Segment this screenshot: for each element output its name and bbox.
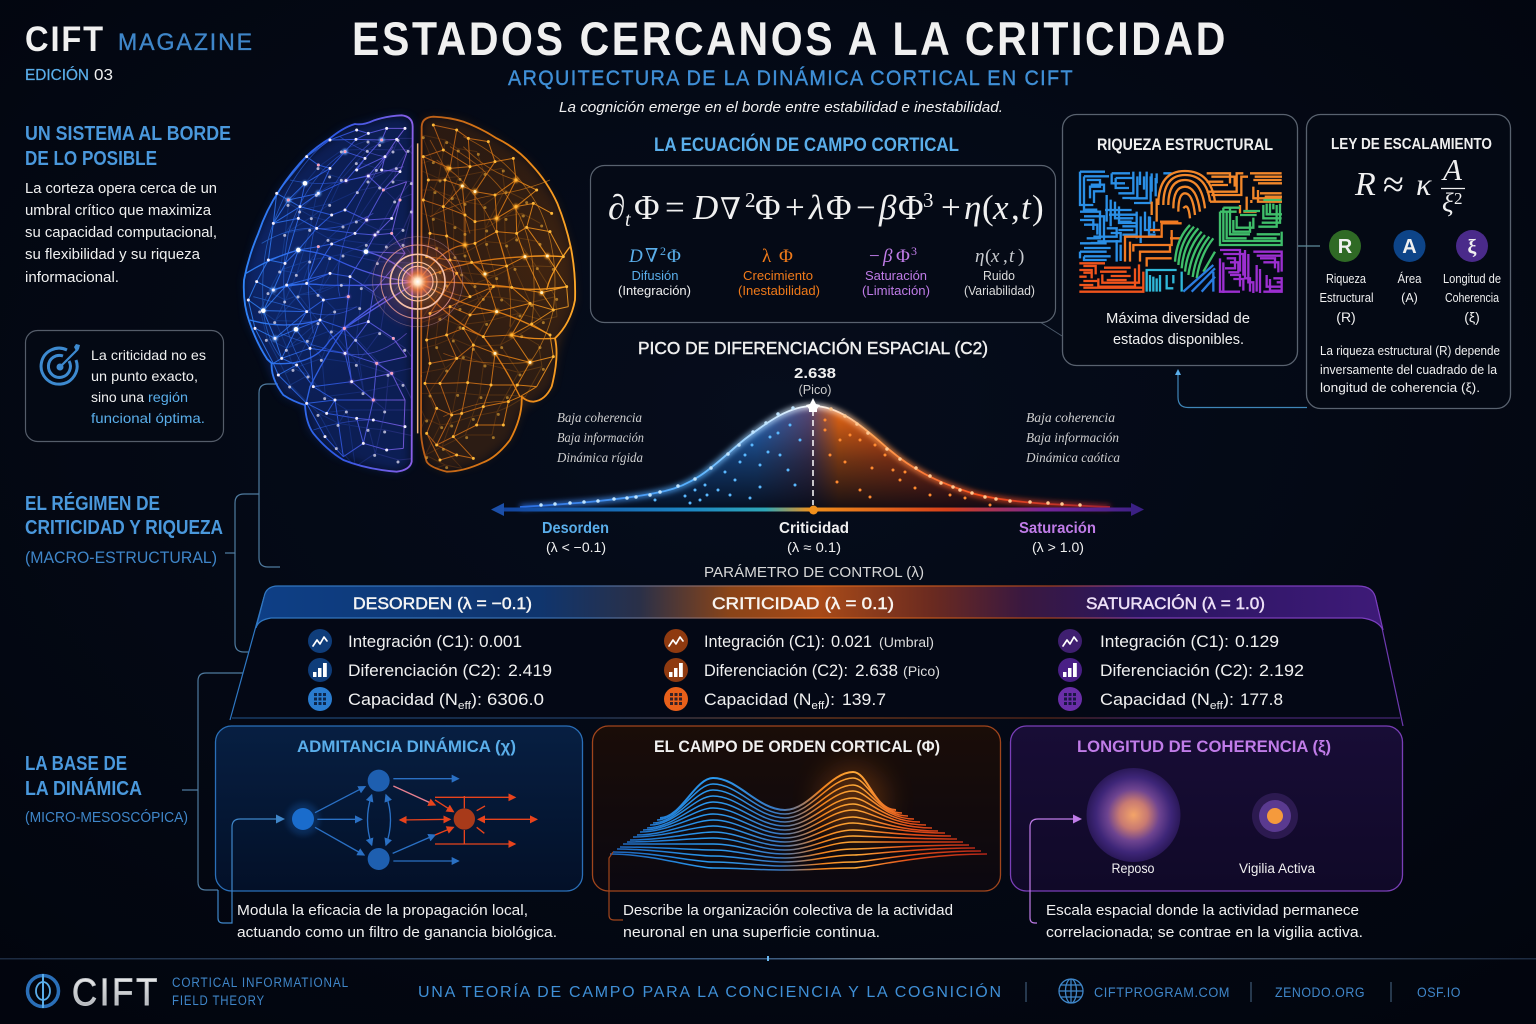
- connectors: left tree: [182, 384, 280, 890]
- title: ESTADOS CERCANOS A LA CRITICIDAD: [352, 12, 1228, 65]
- formula: 2: [1454, 189, 1462, 208]
- annotation: right side: Baja información: [1026, 431, 1119, 446]
- callout: criticality region: sino una: [91, 389, 144, 405]
- axis labels: [542, 520, 1096, 581]
- annotation: left side: Baja información: [557, 431, 644, 446]
- main equation: 2: [745, 188, 756, 212]
- icon: globe: [1059, 979, 1083, 1003]
- main equation: =: [665, 188, 685, 227]
- panel: coherence length: [1010, 726, 1402, 891]
- description: admittance: Modula la eficacia de la propagación local,: [237, 902, 528, 919]
- annotation: left side: [556, 411, 644, 466]
- explanation: [1320, 344, 1500, 395]
- intro text block: UN SISTEMA AL BORDE: [25, 123, 231, 145]
- arrow: richness to variables: [1298, 245, 1320, 247]
- main equation: λ: [808, 188, 824, 227]
- term: noise: [964, 246, 1035, 298]
- variable: R: R: [1338, 236, 1353, 258]
- peak value: 2.638: [794, 365, 836, 382]
- section label: regime: EL RÉGIMEN DE: [25, 492, 160, 515]
- variable: A: A: [1402, 236, 1417, 258]
- main equation: D: [692, 188, 718, 227]
- variable: A: Área: [1398, 271, 1422, 286]
- explanation: inversamente del cuadrado de la: [1320, 363, 1497, 377]
- intro text block: su capacidad computacional,: [25, 225, 217, 241]
- intro text block: [25, 123, 231, 286]
- section label: base: LA DINÁMICA: [25, 777, 142, 800]
- peak value: [794, 365, 836, 397]
- term: growth: Φ: [779, 246, 793, 267]
- intro text block: umbral crítico que maximiza: [25, 203, 212, 219]
- arrow: into coherence: [1030, 814, 1082, 923]
- term: growth: [738, 246, 820, 298]
- footer: CIFTPROGRAM.COM: [1094, 984, 1230, 1000]
- tagline: La cognición emerge en el borde entre estabilidad e inestabilidad.: [559, 99, 1003, 116]
- column: criticality: Diferenciación (C2):: [704, 662, 848, 680]
- section label: regime: (MACRO-ESTRUCTURAL): [25, 548, 217, 567]
- rest state: Reposo: [1112, 861, 1154, 876]
- footer: FIELD THEORY: [172, 993, 265, 1008]
- column: saturation: 2.192: [1259, 662, 1304, 680]
- logo mark: [28, 974, 58, 1008]
- right neurons: [423, 125, 567, 460]
- labyrinth fingerprint: [1079, 171, 1286, 296]
- annotation: left side: Dinámica rígida: [556, 451, 643, 466]
- term: diffusion: ∇: [645, 246, 658, 267]
- main equation: t: [625, 209, 631, 231]
- axis: [500, 508, 1135, 512]
- column: criticality: (Pico): [903, 664, 940, 679]
- panel: dynamic admittance: [216, 726, 582, 891]
- axis labels: PARÁMETRO DE CONTROL (λ): [704, 564, 924, 581]
- variable: xi: [1443, 230, 1501, 325]
- term: diffusion: 2: [660, 244, 666, 258]
- table body outline: [230, 597, 1402, 718]
- annotation: right side: [1025, 411, 1120, 466]
- main equation: ∂: [608, 188, 625, 227]
- peak marker: [812, 410, 814, 505]
- variable: R: Riqueza: [1326, 272, 1366, 286]
- column: criticality: Capacidad (N: [704, 691, 805, 709]
- arrow: law back to richness: [1175, 369, 1307, 408]
- term: noise: x: [990, 246, 1000, 267]
- variable: R: (R): [1336, 309, 1356, 325]
- column: saturation: 177.8: [1240, 691, 1283, 709]
- main equation: 3: [923, 188, 934, 212]
- term: saturation: β: [882, 246, 893, 267]
- footer: OSF.IO: [1417, 984, 1461, 1000]
- variable: xi: Coherencia: [1445, 291, 1499, 305]
- panel: field equation: [590, 166, 1062, 336]
- column: disorder: 2.419: [508, 662, 552, 680]
- footer: [0, 956, 1536, 1014]
- section label: base: (MICRO-MESOSCÓPICA): [25, 809, 188, 826]
- column: disorder: ):: [471, 691, 482, 709]
- column: disorder: eff: [458, 700, 472, 712]
- network diagram: [286, 770, 537, 870]
- column: saturation: Capacidad (N: [1100, 691, 1201, 709]
- description: admittance: actuando como un filtro de ganancia biológica.: [237, 924, 557, 941]
- formula: [1354, 152, 1465, 218]
- variable: xi: (ξ): [1464, 309, 1480, 325]
- term: diffusion: (Integración): [618, 283, 691, 298]
- left hemisphere: [244, 115, 419, 472]
- column: saturation: ):: [1223, 691, 1234, 709]
- variable: xi: Longitud de: [1443, 272, 1501, 286]
- description: field: Describe la organización colectiva de la actividad: [623, 902, 953, 919]
- footer: UNA TEORÍA DE CAMPO PARA LA CONCIENCIA Y LA COGNICIÓN: [418, 982, 1001, 1001]
- main equation: −: [856, 188, 876, 227]
- column: saturation: eff: [1210, 700, 1224, 712]
- right neurons glow: [448, 168, 547, 362]
- section label: base: [25, 753, 188, 826]
- brain illustration: [244, 115, 575, 473]
- main equation: Φ: [634, 188, 660, 227]
- table header band: [256, 586, 1383, 630]
- column: saturation: Integración (C1):: [1100, 633, 1229, 651]
- description: field: neuronal en una superficie continua.: [623, 924, 880, 941]
- term: noise: ): [1018, 246, 1024, 267]
- description: field: [623, 902, 953, 941]
- term: diffusion: Φ: [667, 246, 681, 267]
- intro text block: La corteza opera cerca de un: [25, 181, 217, 197]
- panel: cortical order field: [592, 726, 1000, 891]
- term: saturation: Φ: [896, 246, 910, 267]
- formula: κ: [1416, 166, 1432, 202]
- main equation: Φ: [755, 188, 781, 227]
- term: saturation: Saturación: [865, 268, 927, 283]
- peak value: (Pico): [798, 383, 832, 397]
- variable: R: [1320, 230, 1374, 325]
- axis labels: Saturación: [1019, 520, 1096, 537]
- main equation: Φ: [826, 188, 852, 227]
- axis labels: Desorden: [542, 520, 609, 537]
- column: criticality: 139.7: [842, 691, 886, 709]
- column: disorder: Diferenciación (C2):: [348, 662, 501, 680]
- axis labels: (λ ≈ 0.1): [787, 540, 841, 555]
- column: criticality: eff: [811, 700, 825, 712]
- data points: [541, 408, 793, 505]
- column: criticality: 0.021: [831, 633, 872, 651]
- footer: CORTICAL INFORMATIONAL: [172, 975, 349, 990]
- main equation: (: [982, 188, 994, 227]
- brand: CIFT Magazine: CIFT: [25, 20, 105, 59]
- term: growth: λ: [762, 246, 772, 267]
- active wake state: Vigilia Activa: [1239, 861, 1315, 876]
- chart: bell curve of differentiation: [491, 398, 1144, 516]
- main equation: η: [964, 188, 981, 227]
- column: criticality: 2.638: [855, 662, 898, 680]
- brand: CIFT Magazine: EDICIÓN: [25, 67, 89, 84]
- term: noise: Ruido: [983, 268, 1015, 283]
- main equation: +: [785, 188, 805, 227]
- column headers: DESORDEN (λ = −0.1): [353, 594, 532, 613]
- column: criticality: Integración (C1):: [704, 633, 825, 651]
- term: noise: (Variabilidad): [964, 283, 1035, 298]
- panel: structural richness: RIQUEZA ESTRUCTURAL: [1097, 136, 1273, 154]
- intro text block: DE LO POSIBLE: [25, 148, 157, 170]
- callout: criticality region: La criticidad no es: [91, 347, 206, 363]
- term: noise: (: [985, 246, 991, 267]
- term: saturation: −: [869, 246, 880, 267]
- term: noise: ,: [1003, 246, 1008, 267]
- rest state: [1086, 768, 1180, 876]
- section label: regime: [25, 492, 223, 567]
- term: growth: (Inestabilidad): [738, 283, 820, 298]
- panel: scaling law: LEY DE ESCALAMIENTO: [1331, 136, 1492, 153]
- column: disorder: Integración (C1):: [348, 633, 474, 651]
- brand: CIFT Magazine: 03: [94, 67, 113, 84]
- table: regimes comparison: [230, 586, 1403, 726]
- explanation: longitud de coherencia (ξ).: [1320, 381, 1480, 395]
- formula: A: [1441, 152, 1463, 187]
- annotation: right side: Baja coherencia: [1026, 411, 1115, 426]
- formula: R: [1354, 166, 1376, 203]
- term: diffusion: Difusión: [632, 268, 678, 283]
- section label: regime: CRITICIDAD Y RIQUEZA: [25, 517, 223, 539]
- main equation: ,: [1011, 188, 1020, 227]
- glow behind orange peak: [819, 766, 887, 834]
- left hemisphere glow: [245, 117, 412, 472]
- section label: base: LA BASE DE: [25, 753, 127, 775]
- 3D wave surface: [610, 772, 987, 870]
- variable: A: (A): [1401, 291, 1418, 305]
- axis labels: (λ < −0.1): [546, 540, 606, 555]
- term: noise: η: [975, 246, 984, 267]
- panel: dynamic admittance: ADMITANCIA DINÁMICA (χ): [297, 737, 516, 756]
- brand: CIFT Magazine: [25, 20, 254, 84]
- variable: xi: ξ: [1468, 236, 1477, 258]
- term: saturation: [862, 244, 930, 298]
- central critical point with rings: [368, 143, 468, 433]
- main equation: +: [941, 188, 961, 227]
- heading: peak of spatial differentiation: PICO DE DIFERENCIACIÓN ESPACIAL (C2): [638, 337, 988, 358]
- description: coherence: correlacionada; se contrae en la vigilia activa.: [1046, 924, 1363, 941]
- description: coherence: [1046, 902, 1363, 941]
- column: disorder: Capacidad (N: [348, 691, 449, 709]
- main equation: ): [1032, 188, 1044, 227]
- panel: structural richness: Máxima diversidad de: [1106, 311, 1250, 327]
- icon: target: [41, 344, 80, 384]
- callout: criticality region: un punto exacto,: [91, 368, 198, 384]
- explanation: La riqueza estructural (R) depende: [1320, 344, 1500, 358]
- axis labels: (λ > 1.0): [1032, 540, 1084, 555]
- column: saturation: 0.129: [1235, 633, 1279, 651]
- column: criticality: [664, 629, 940, 712]
- column: disorder: 0.001: [479, 633, 522, 651]
- column: disorder: 6306.0: [487, 691, 544, 709]
- column headers: CRITICIDAD (λ = 0.1): [712, 594, 894, 613]
- formula: ξ: [1442, 188, 1454, 218]
- term: growth: Crecimiento: [743, 268, 813, 283]
- column: saturation: Diferenciación (C2):: [1100, 662, 1253, 680]
- main equation: Φ: [898, 188, 924, 227]
- column: criticality: ):: [824, 691, 835, 709]
- term: diffusion: D: [628, 246, 643, 267]
- panel: cortical order field: EL CAMPO DE ORDEN CORTICAL (Φ): [654, 737, 940, 756]
- left neurons: [248, 128, 405, 450]
- footer: ZENODO.ORG: [1275, 984, 1365, 1000]
- intro text block: su flexibilidad y su riqueza: [25, 247, 201, 263]
- main equation: t: [1021, 188, 1032, 227]
- main equation: β: [878, 188, 897, 227]
- description: admittance: [237, 902, 557, 941]
- column: criticality: (Umbral): [879, 635, 934, 650]
- heading: equation: LA ECUACIÓN DE CAMPO CORTICAL: [654, 134, 959, 156]
- subtitle: ARQUITECTURA DE LA DINÁMICA CORTICAL EN CIFT: [508, 67, 1074, 90]
- variable: R: Estructural: [1320, 291, 1374, 305]
- column: disorder: [308, 629, 552, 712]
- main equation: ∇: [720, 193, 741, 226]
- callout: criticality region: región: [148, 389, 188, 405]
- description: coherence: Escala espacial donde la actividad permanece: [1046, 902, 1359, 919]
- callout: criticality region: funcional óptima.: [91, 410, 205, 426]
- left neurons glow: [263, 140, 382, 338]
- intro text block: informacional.: [25, 270, 119, 286]
- callout: criticality region: [26, 330, 224, 442]
- panel: structural richness: estados disponibles.: [1113, 332, 1244, 348]
- panel: coherence length: LONGITUD DE COHERENCIA (ξ): [1077, 737, 1331, 756]
- column headers: SATURACIÓN (λ = 1.0): [1086, 594, 1265, 613]
- column: saturation: [1058, 629, 1304, 712]
- formula: ≈: [1383, 164, 1404, 206]
- panel: structural richness: [1062, 114, 1298, 366]
- main equation: x: [992, 188, 1009, 227]
- annotation: right side: Dinámica caótica: [1025, 451, 1120, 466]
- right hemisphere glow: [422, 118, 575, 472]
- arrow: into admittance: [218, 814, 285, 923]
- right hemisphere: [412, 117, 575, 473]
- panel: scaling law: [1306, 114, 1510, 408]
- annotation: left side: Baja coherencia: [557, 411, 642, 426]
- footer: CIFT: [72, 972, 160, 1014]
- term: saturation: (Limitación): [862, 283, 930, 298]
- column headers: [353, 594, 1265, 613]
- term: saturation: 3: [911, 244, 917, 258]
- term: noise: t: [1009, 246, 1015, 267]
- active wake state: [1239, 793, 1315, 876]
- connector: order field: [609, 852, 623, 920]
- term: diffusion: [618, 244, 691, 298]
- variable: A: [1394, 230, 1426, 305]
- brand: CIFT Magazine: MAGAZINE: [118, 29, 254, 56]
- axis labels: Criticidad: [779, 520, 849, 537]
